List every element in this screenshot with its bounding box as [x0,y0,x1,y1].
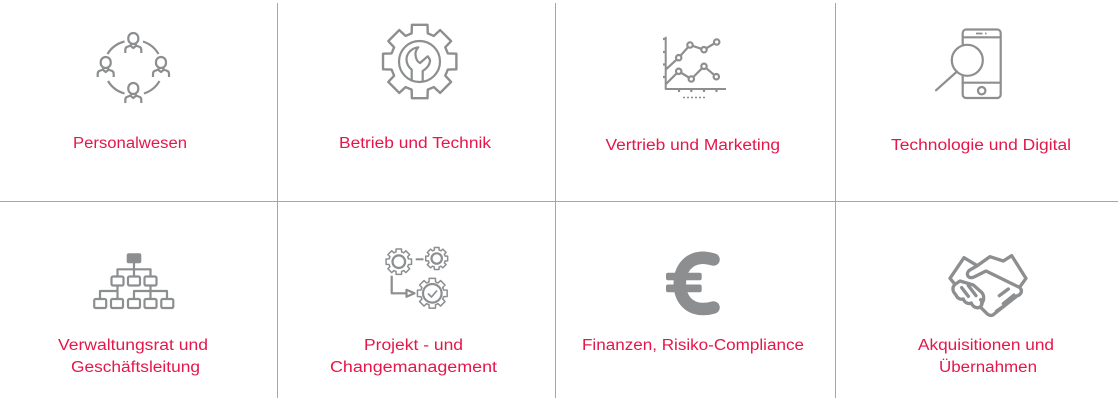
panel: Finanzen, Risiko-Compliance [582,258,804,354]
label: Verwaltungsrat und [58,337,208,354]
label: Akquisitionen und [918,337,1054,354]
icon: phone with magnifier [936,30,1001,98]
icon: euro sign [666,258,714,309]
panel: Technologie und Digital [891,30,1071,154]
panel: Betrieb und Technik [339,25,491,152]
icon: handshake [950,256,1026,315]
panel: Akquisitionen und Übernahmen [918,256,1054,376]
label: Finanzen, Risiko-Compliance [582,337,804,354]
label: Technologie und Digital [891,137,1071,154]
label: Personalwesen [73,135,187,152]
label: Vertrieb und Marketing [606,137,780,154]
panel: Projekt- und Changemanagement [330,248,498,376]
label: Betrieb und Technik [339,135,491,152]
panel: Verwaltungsrat und Geschäftsleitung [58,253,208,376]
panel: Personalwesen [73,33,187,152]
label line 2: Changemanagement [330,359,498,376]
icon: line chart [663,37,726,98]
icon: org chart [94,253,173,308]
icon: people in a circle [98,33,169,103]
icon: gear with wrench [383,25,456,98]
label: Projekt - und [364,337,463,354]
icon: process gears [386,248,448,308]
panel: Vertrieb und Marketing [606,37,780,154]
label line 2: Übernahmen [939,358,1037,376]
label line 2: Geschäftsleitung [71,359,200,376]
